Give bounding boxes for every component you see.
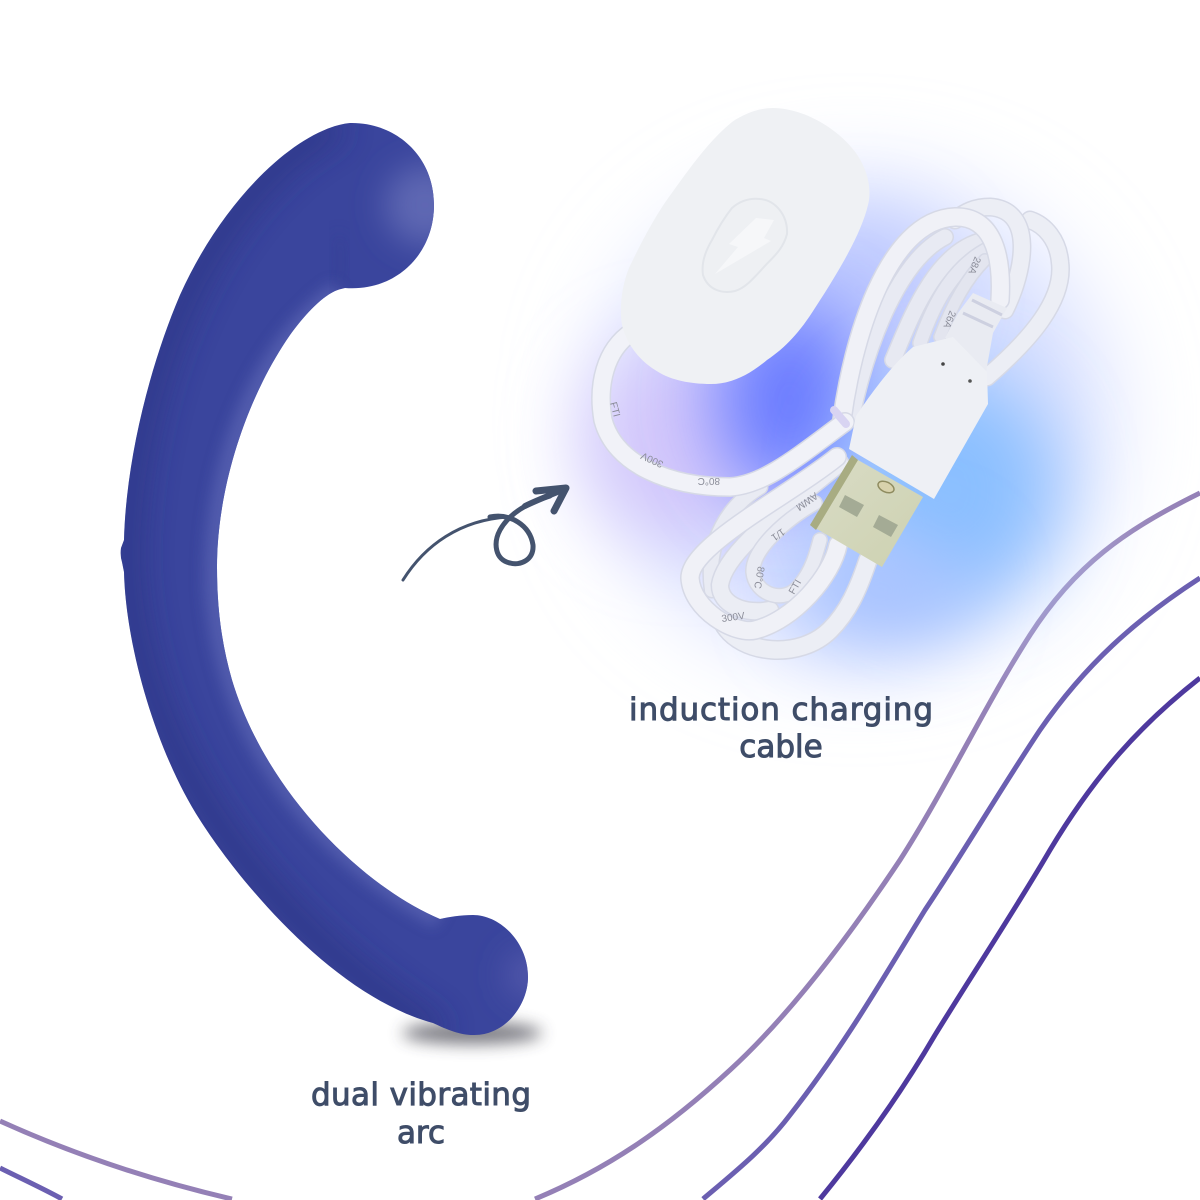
wavy decorative lines <box>0 493 1200 1199</box>
gradient glow behind charging cable <box>585 185 1105 655</box>
charging cable bundle <box>601 207 1060 650</box>
plug body <box>849 337 988 499</box>
wireless charging puck <box>621 108 870 384</box>
lower cable loops <box>690 457 868 650</box>
dual vibrating arc product <box>120 123 528 1035</box>
strain relief <box>945 293 1007 372</box>
cable printed markings: 26A <box>940 309 957 330</box>
cable printed markings: 300V <box>639 449 665 469</box>
cable printed markings <box>607 255 982 625</box>
cable printed markings: AWM <box>794 490 820 512</box>
shadow under arc <box>402 1022 542 1044</box>
arrow from arc to cable <box>403 488 566 580</box>
cable printed markings: 1/1 <box>769 526 787 543</box>
label: dual vibrating arc: dual vibrating <box>311 1077 531 1113</box>
lightning badge <box>703 199 787 292</box>
cable printed markings: 80°C <box>751 565 766 589</box>
cable printed markings: FTI <box>787 578 804 596</box>
charger lead loop <box>601 332 845 487</box>
upper cable loops <box>842 207 1060 420</box>
cable printed markings: 28A <box>965 255 982 276</box>
USB plug <box>810 293 1007 567</box>
label: induction charging cable: cable <box>739 729 823 765</box>
metal connector <box>810 455 923 567</box>
label: induction charging cable: induction charging <box>629 692 933 728</box>
cable printed markings: 80°C <box>698 475 720 486</box>
cable printed markings: 300V <box>721 611 746 625</box>
label: dual vibrating arc: arc <box>397 1115 445 1151</box>
cable printed markings: FTI <box>607 401 622 418</box>
cable tie <box>834 410 846 424</box>
